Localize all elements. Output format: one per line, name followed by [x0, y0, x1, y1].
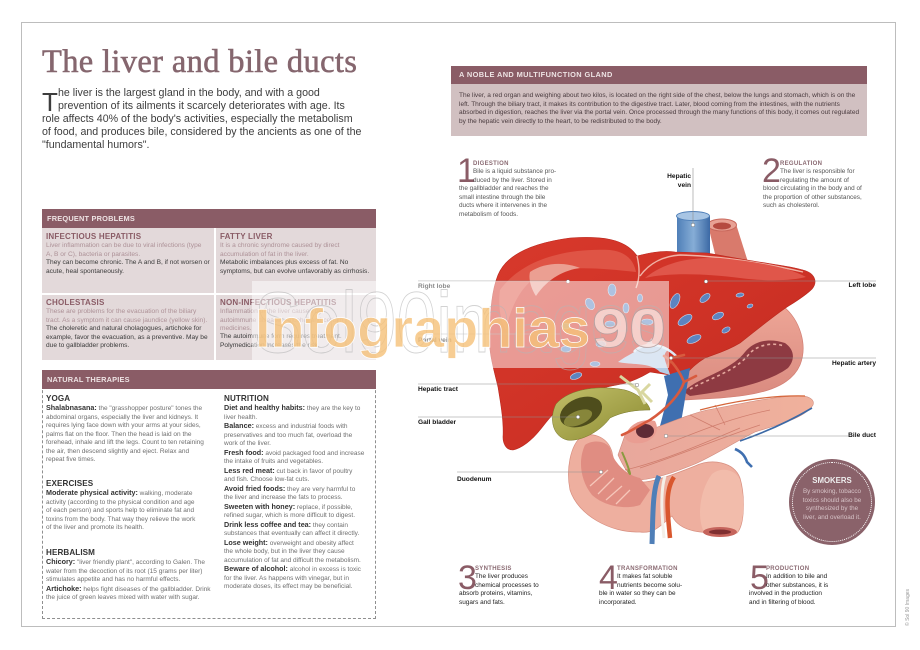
- text: nutrition: Balance: excess and industrial foods with: [224, 421, 348, 430]
- item 4: transformation: TRANSFORMATION: [617, 566, 678, 572]
- cell: cholestasis: CHOLESTASIS: [46, 298, 105, 307]
- text: nutrition: NUTRITION: [224, 394, 269, 403]
- cell: fatty liver: [216, 228, 376, 293]
- cell: cholestasis: [42, 295, 214, 360]
- text: nutrition: refined sugar, which is more difficult to digest.: [224, 512, 355, 519]
- watermark text: 90: [592, 297, 666, 359]
- item 2: regulation: blood circulating in the body and of: [763, 185, 862, 192]
- leader lines: [418, 168, 876, 472]
- cell: infectious hepatitis: INFECTIOUS HEPATITIS: [46, 232, 141, 241]
- cell: fatty liver: FATTY LIVER: [220, 232, 273, 241]
- organ: liver: [490, 237, 815, 450]
- text: nutrition: preservatives and too much fat, overload the: [224, 432, 352, 438]
- cell: cholestasis: The choleretic and natural cholagogues, artichoke for: [46, 325, 201, 332]
- text: herbalism: Artichoke: helps fight diseases of the gallbladder. Drink: [46, 584, 211, 592]
- intro text: prevention of its ailments it scarcely deteriorates with age. Its: [58, 100, 345, 112]
- cell: cholestasis: tract. As a symptom it can cause jaundice (yellow skin).: [46, 316, 207, 324]
- cell: fatty liver: symptoms, but can evolve unfavorably as cirrhosis.: [220, 268, 369, 274]
- text: nutrition: work of the liver.: [224, 440, 271, 447]
- text: nutrition: the whole body, but in the liver they cause: [224, 548, 345, 555]
- text: herbalism: HERBALISM: [46, 548, 95, 557]
- text: yoga: the air, then descend slightly and eject. Relax and: [46, 448, 189, 454]
- text: herbalism: water from the decoction of its root (15 grams per liter): [46, 568, 202, 574]
- heading: noble gland: A NOBLE AND MULTIFUNCTION GLAND: [459, 70, 613, 79]
- text: herbalism: [46, 548, 211, 601]
- item 4: transformation: nutrients become solu-: [617, 582, 682, 589]
- intro text: [42, 87, 361, 151]
- item 1: digestion: metabolism of foods.: [459, 211, 518, 218]
- text: nutrition: Drink less coffee and tea: they contain: [224, 520, 348, 528]
- text: yoga: Shalabnasana: the "grasshopper posture" tones the: [46, 403, 202, 412]
- text: exercises: EXERCISES: [46, 479, 93, 488]
- cell: fatty liver: accumulation of fat in the liver.: [220, 250, 309, 258]
- organ: stomach: [681, 306, 803, 400]
- item 2: regulation: REGULATION: [780, 161, 822, 167]
- intro text: role affects 40% of the body's activities, especially the metabolism: [42, 113, 353, 125]
- item 1: digestion: [457, 152, 556, 218]
- intro text: T: [42, 87, 58, 117]
- item 4: transformation: It makes fat soluble: [617, 573, 672, 580]
- cell: non-infectious hepatitis: Polymedication increases the risk.: [220, 342, 320, 348]
- heading: frequent problems: [42, 209, 376, 228]
- text: yoga: [46, 394, 204, 463]
- text: nutrition: the intake of fruits and vegetables.: [224, 458, 323, 465]
- vessel: hepatic vein: [676, 212, 710, 258]
- label: gall bladder: Gall bladder: [418, 419, 456, 426]
- number 4: 4: [599, 559, 618, 597]
- heading: natural therapies: NATURAL THERAPIES: [47, 375, 130, 384]
- panel: natural therapies: moderate doses, its effect may be beneficial.: [224, 583, 353, 590]
- cell: non-infectious hepatitis: Inflammation of the liver caused by: [220, 308, 322, 315]
- label: left lobe: Left lobe: [849, 282, 876, 289]
- organ: pancreas: [618, 396, 813, 480]
- number 2: 2: [762, 152, 781, 190]
- cell: cholestasis: example, favor the evacuation, as a preventive. May be: [46, 334, 208, 340]
- text: exercises: of each person) and sports help to eliminate fat and: [46, 507, 194, 514]
- callout: smokers: liver, and overload it.: [803, 514, 861, 521]
- panel: a noble and multifunction gland: [451, 66, 867, 136]
- item 5: production: involved in the production: [749, 590, 822, 597]
- cell: infectious hepatitis: [42, 228, 214, 293]
- item 3: synthesis: sugars and fats.: [459, 599, 505, 606]
- intro text: of food, and produces bile, considered by the ancients as one of the: [42, 126, 361, 138]
- label: hepatic vein: vein: [678, 182, 691, 189]
- text: nutrition: [224, 394, 364, 590]
- cell: fatty liver: It is a chronic syndrome caused by direct: [220, 242, 339, 249]
- label: right lobe: Right lobe: [418, 283, 450, 290]
- watermark text: Infographias: [255, 297, 590, 359]
- leader dots: [566, 223, 708, 474]
- vessel: aorta: [708, 219, 748, 262]
- cell: infectious hepatitis: A, B or C), bacteria or parasites.: [46, 250, 140, 258]
- item 5: production: and in filtering of blood.: [749, 599, 816, 606]
- label: duodenum: Duodenum: [457, 476, 491, 483]
- text: yoga: YOGA: [46, 394, 70, 403]
- item 4: transformation: incorporated.: [599, 599, 637, 606]
- cell: non-infectious hepatitis: NON-INFECTIOUS HEPATITIS: [220, 298, 337, 307]
- panel: frequent problems: [42, 209, 376, 360]
- number 5: 5: [750, 559, 769, 597]
- intro text: he liver is the largest gland in the body, and with a good: [58, 87, 320, 99]
- item 5: production: PRODUCTION: [766, 566, 809, 572]
- text: herbalism: stimulates appetite and has no harmful effects.: [46, 576, 180, 583]
- item 5: production: In addition to bile and: [766, 573, 827, 580]
- item 2: regulation: the proportion of other substances,: [763, 194, 862, 201]
- title: The liver and bile ducts: [42, 44, 357, 80]
- text: nutrition: for the liver. As happens with vinegar, but in: [224, 574, 349, 582]
- callout: smokers: [789, 459, 875, 545]
- body text: The liver, a red organ and weighing about two kilos, is located on the right side of the chest, below the lungs and stomach, which is on the: [459, 92, 855, 99]
- number 1: 1: [457, 152, 476, 190]
- item 1: digestion: the gallbladder and reaches the: [459, 185, 549, 192]
- label: hepatic artery: Hepatic artery: [832, 360, 876, 367]
- watermark text: Sol90images: [254, 275, 666, 371]
- text: exercises: [46, 479, 196, 531]
- text: nutrition: Diet and healthy habits: they are the key to: [224, 403, 360, 412]
- item 1: digestion: small intestine through the bile: [459, 194, 545, 201]
- item 5: production: other substances, it is: [766, 582, 828, 589]
- body text: by the hepatic vein directly to the heart, to be redistributed to the body.: [459, 118, 662, 125]
- heading: frequent problems: FREQUENT PROBLEMS: [47, 214, 135, 223]
- text: yoga: forehead, inhale and lift the legs. Count to ten retaining: [46, 439, 204, 446]
- item 3: synthesis: SYNTHESIS: [475, 566, 512, 572]
- text: nutrition: Beware of alcohol: alcohol in excess is toxic: [224, 564, 361, 573]
- item 3: synthesis: [458, 559, 539, 606]
- body text: [459, 92, 859, 125]
- callout: smokers: synthesized by the: [806, 505, 858, 512]
- callout: smokers: By smoking, tobacco: [803, 488, 861, 495]
- organ: gall bladder: [552, 376, 657, 474]
- heading: noble gland: [451, 66, 867, 84]
- item 4: transformation: ble in water so they can be: [599, 590, 676, 597]
- heading: natural therapies: [42, 370, 376, 389]
- item 1: digestion: duced by the liver. Stored in: [473, 177, 552, 184]
- text: exercises: Moderate physical activity: walking, moderate: [46, 488, 192, 497]
- text: nutrition: liver health.: [224, 414, 257, 420]
- callout: smokers: toxics should also be: [803, 497, 861, 504]
- number 3: 3: [458, 559, 477, 597]
- text: yoga: palms flat on the floor. Then the head is laid on the: [46, 430, 192, 438]
- watermark: [252, 281, 669, 368]
- cell: non-infectious hepatitis: [216, 295, 376, 360]
- item 5: production: [749, 559, 828, 606]
- text: yoga: repeat five times.: [46, 456, 96, 463]
- text: nutrition: Less red meat: cut back in favor of poultry: [224, 466, 352, 474]
- item 3: synthesis: The liver produces: [475, 573, 528, 580]
- item 2: regulation: The liver is responsible for: [780, 168, 855, 175]
- text: nutrition: and fish. Choose low-fat cuts.: [224, 476, 309, 483]
- item 2: regulation: [762, 152, 862, 209]
- vessel: hepatic artery: [622, 355, 696, 435]
- cell: cholestasis: due to gallbladder problems.: [46, 342, 129, 349]
- label: hepatic vein: Hepatic: [667, 173, 691, 180]
- cell: non-infectious hepatitis: medicines.: [220, 325, 252, 332]
- cell: cholestasis: These are problems for the evacuation of the biliary: [46, 308, 196, 315]
- dotted ring: [792, 462, 872, 542]
- item 2: regulation: regulating the amount of: [780, 177, 849, 184]
- item 1: digestion: Bile is a liquid substance pro-: [473, 168, 556, 175]
- label: hepatic vein: [667, 173, 691, 189]
- text: nutrition: Lose weight: overweight and obesity affect: [224, 538, 354, 546]
- text: herbalism: Chicory: "liver friendly plant", according to Galen. The: [46, 557, 205, 566]
- organ: duodenum and intestine: [568, 435, 743, 544]
- cell: infectious hepatitis: Liver inflammation can be due to viral infections (type: [46, 242, 201, 249]
- cell: non-infectious hepatitis: The autoimmune form requires treatment.: [220, 333, 342, 340]
- credit: © Sol 90 Images: [905, 589, 911, 626]
- text: exercises: activity (according to the physical condition and age: [46, 498, 195, 506]
- item 1: digestion: ducts where it intervenes in the: [459, 202, 547, 209]
- text: nutrition: Avoid fried foods: they are very harmful to: [224, 484, 355, 492]
- text: yoga: abdominal organs, especially the liver and kidneys. It: [46, 414, 198, 420]
- vessel: portal vein and branches: [618, 338, 690, 428]
- cell: infectious hepatitis: acute, heal spontaneously.: [46, 268, 124, 274]
- text: nutrition: the liver and increase the fats to process.: [224, 494, 343, 501]
- item 3: synthesis: chemical processes to: [475, 582, 539, 589]
- body text: left. Through the biliary tract, it makes its contribution to the digestive tract. Later, blood coming from the intestines, with the nutrients: [459, 101, 840, 108]
- label: bile duct: Bile duct: [848, 432, 876, 439]
- text: herbalism: the juice of green leaves mixed with water with sugar.: [46, 594, 200, 601]
- text: nutrition: accumulation of fat and difficult the metabolism.: [224, 556, 361, 564]
- callout: smokers: SMOKERS: [812, 476, 852, 485]
- label: portal vein: Portal vein: [418, 337, 452, 344]
- cell: infectious hepatitis: They can become chronic. The A and B, if not worsen or: [46, 259, 210, 266]
- item 2: regulation: such as cholesterol.: [763, 202, 819, 209]
- text: exercises: of the liver and promote its health.: [46, 524, 144, 531]
- text: yoga: requires lying face down with your arms at your sides,: [46, 422, 201, 429]
- text: nutrition: substances that eventually can affect it directly.: [224, 530, 359, 537]
- item 1: digestion: DIGESTION: [473, 161, 509, 167]
- text: exercises: toxins from the body. That way they relieve the work: [46, 516, 195, 522]
- text: nutrition: Sweeten with honey: replace, if possible,: [224, 502, 353, 510]
- intro text: "fundamental humors".: [42, 139, 150, 151]
- item 4: transformation: [599, 559, 682, 606]
- panel: natural therapies: [42, 370, 376, 619]
- cell: non-infectious hepatitis: autoimmune diseases, alcohol and certain: [220, 316, 343, 324]
- item 3: synthesis: absorb proteins, vitamins,: [459, 590, 532, 597]
- cell: fatty liver: Metabolic imbalances plus excess of fat. No: [220, 259, 348, 266]
- dashed border: [42, 370, 376, 619]
- body text: absorbed in digestion, reaches the liver via the portal vein. Once processed through the many functions of this body, it comes out regulated: [459, 109, 859, 116]
- text: nutrition: Fresh food: avoid packaged food and increase: [224, 448, 364, 456]
- label: hepatic tract: Hepatic tract: [418, 386, 458, 393]
